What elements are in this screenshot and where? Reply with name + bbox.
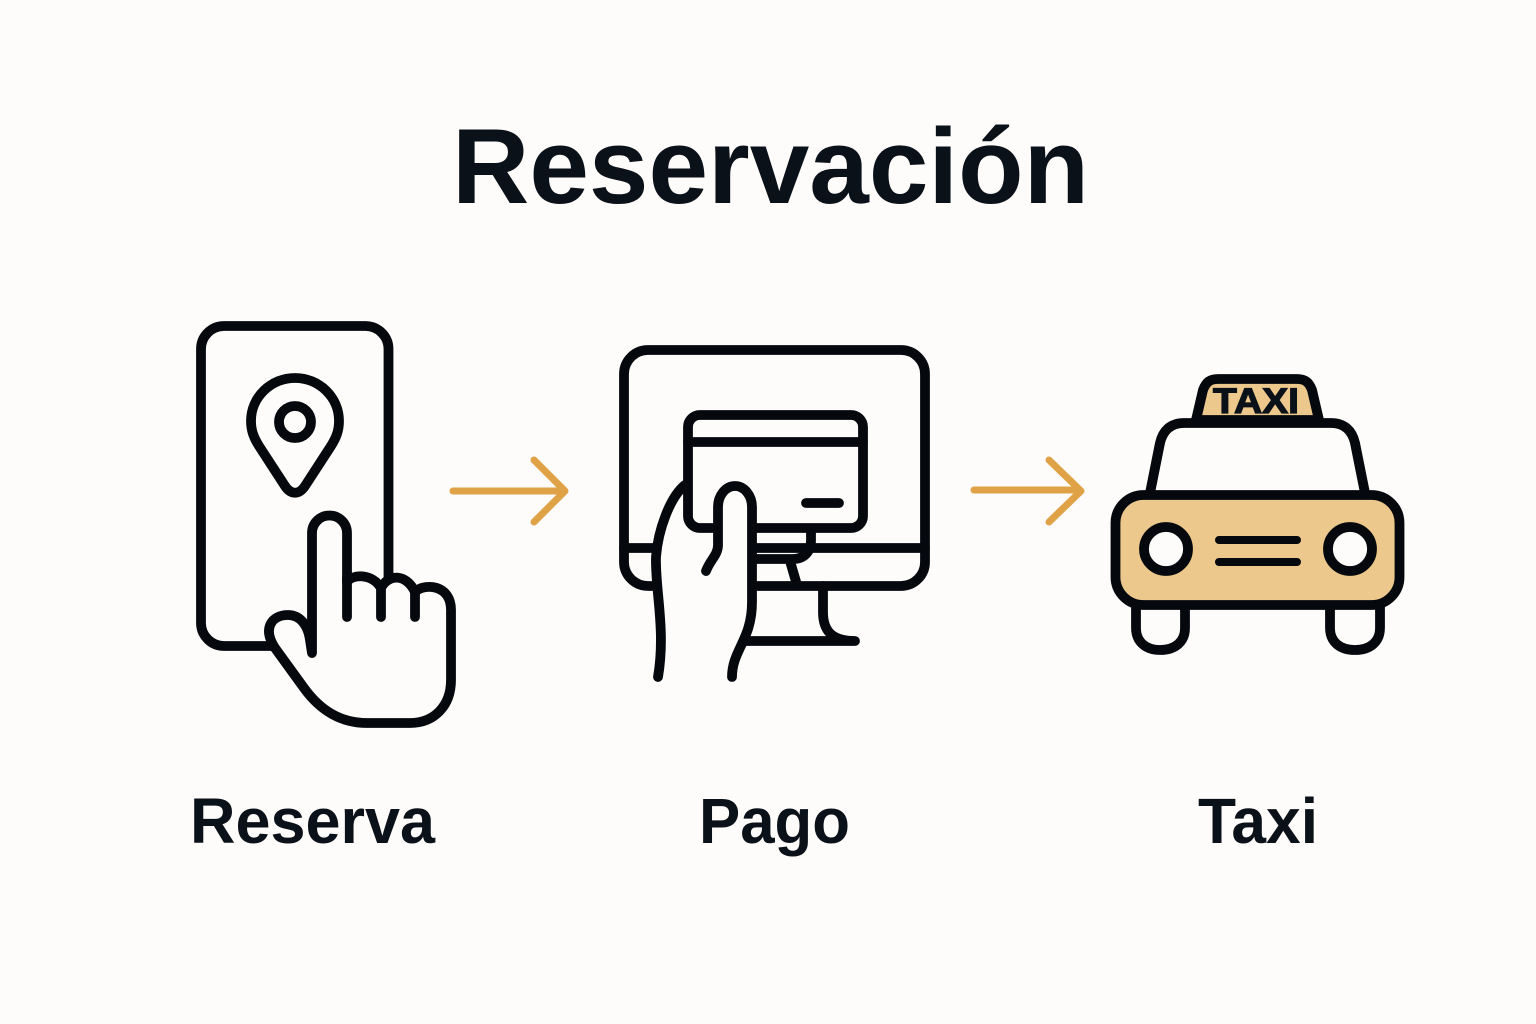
- car body: [1116, 495, 1400, 605]
- cabin: [1150, 423, 1365, 493]
- phone outline: [201, 326, 388, 646]
- finger mask: [718, 486, 752, 560]
- hand: [269, 516, 451, 723]
- grille: [1219, 540, 1297, 562]
- palm mask: [656, 486, 752, 680]
- taxi sign text: TAXI: [1213, 382, 1299, 421]
- card connector: [752, 530, 811, 585]
- taxi roof sign: [1196, 379, 1319, 420]
- monitor stand: [743, 586, 855, 641]
- icon: phone with location pin and tapping hand: [201, 326, 451, 723]
- label: reserva: Reserva: [190, 785, 435, 857]
- hand outline left: [656, 485, 685, 677]
- label: pago: Pago: [699, 785, 850, 857]
- credit card: [688, 415, 863, 528]
- finger and wrist outline: [706, 486, 752, 677]
- location pin: [251, 378, 339, 493]
- finger separators: [347, 578, 415, 617]
- icon: taxi: [1116, 379, 1400, 650]
- right headlight: [1328, 527, 1372, 571]
- arrow: pago to taxi: [974, 460, 1081, 522]
- arrow: reserva to pago: [453, 460, 565, 522]
- label: taxi: Taxi: [1198, 785, 1318, 857]
- card button: [806, 498, 839, 508]
- card stripe: [688, 437, 863, 447]
- wheels: [1136, 605, 1380, 650]
- left headlight: [1144, 527, 1188, 571]
- pin centre: [279, 406, 311, 438]
- monitor chin line: [624, 543, 925, 553]
- title: Reservación: [452, 106, 1089, 226]
- monitor screen: [624, 350, 925, 586]
- icon: monitor with card and hand: [624, 350, 925, 680]
